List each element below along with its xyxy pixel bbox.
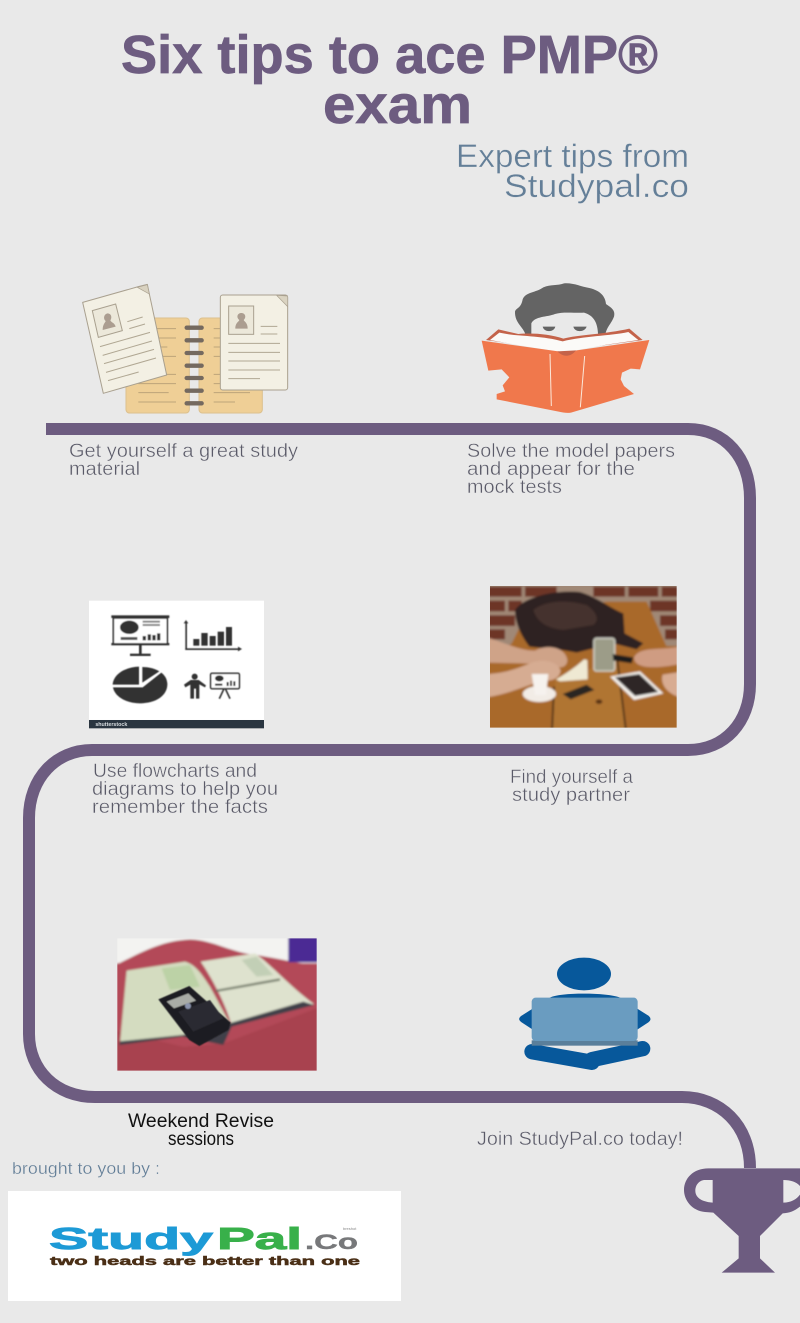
text: tip 3: diagrams to help you — [92, 779, 278, 800]
winding path line — [29, 429, 750, 1168]
text: tip 5 — [128, 1111, 274, 1150]
icon: trophy — [684, 1168, 800, 1273]
text: tip 4 — [510, 767, 633, 806]
text: tip 2 — [467, 441, 675, 498]
text: tip 2: and appear for the — [467, 459, 635, 480]
calculator — [158, 986, 231, 1046]
text: brought to you by: brought to you by : — [12, 1159, 160, 1178]
title: Six tips to ace PMP® — [121, 25, 658, 85]
text: tip 3 — [92, 761, 278, 818]
text: tip 4: study partner — [512, 785, 631, 806]
subtitle — [456, 138, 689, 204]
subtitle: Expert tips from — [456, 138, 689, 174]
text: tip 3: remember the facts — [92, 797, 268, 818]
text: tip 5: sessions — [168, 1129, 234, 1150]
title — [121, 25, 658, 135]
subtitle: Studypal.co — [504, 168, 689, 204]
text: tip 1 — [69, 441, 299, 480]
text: tip 1: material — [69, 459, 140, 480]
text: tip 3: Use flowcharts and — [93, 761, 257, 782]
image: study partners at a table — [487, 583, 680, 731]
icon: person reading a book — [482, 283, 649, 413]
image: flowcharts and diagrams — [89, 601, 264, 728]
logo: StudyPal.co: Study — [49, 1221, 214, 1256]
title: exam — [323, 75, 472, 135]
text: tip 5: Weekend Revise — [128, 1111, 274, 1132]
logo: StudyPal.co: two heads are better than one — [50, 1254, 361, 1268]
logo: StudyPal.co: breshot — [343, 1226, 357, 1231]
text: tip 1: Get yourself a great study — [69, 441, 299, 462]
icon: person with laptop — [519, 958, 650, 1062]
text: tip 2: Solve the model papers — [467, 441, 675, 462]
logo: StudyPal.co: .Co — [305, 1231, 358, 1254]
text: tip 4: Find yourself a — [510, 767, 633, 788]
logo: StudyPal.co — [8, 1191, 401, 1301]
image: open book and calculator — [113, 935, 321, 1074]
logo: StudyPal.co: Pal — [217, 1221, 302, 1256]
text: tip 6: Join StudyPal.co today! — [477, 1129, 683, 1150]
text: tip 2: mock tests — [467, 477, 562, 498]
icon: study material notebooks and papers — [83, 284, 288, 413]
image: flowcharts and diagrams: shutterstock — [95, 722, 127, 728]
